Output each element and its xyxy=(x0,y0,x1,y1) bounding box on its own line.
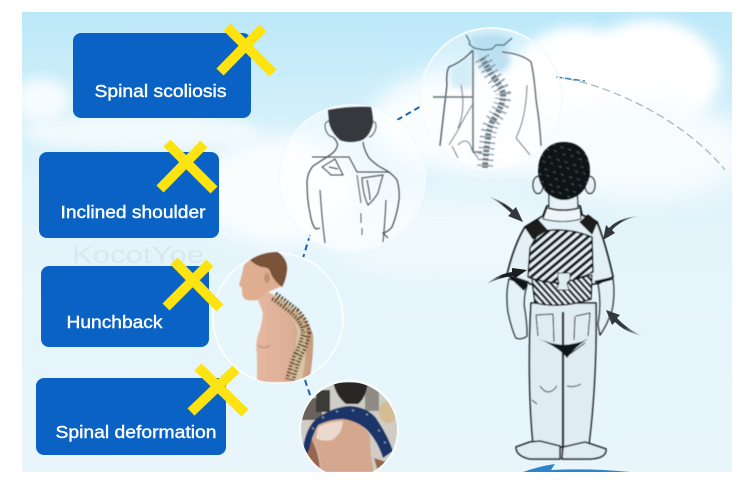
arrow: lower right pointing to hand xyxy=(606,310,643,336)
panel: hunchback label xyxy=(41,266,209,347)
panel: spinal scoliosis circle xyxy=(420,28,562,170)
vest lower xyxy=(532,275,592,305)
curly hair xyxy=(538,142,590,200)
body xyxy=(256,292,313,382)
panel: spinal deformation label xyxy=(36,378,226,455)
neck and collar xyxy=(549,190,578,210)
chest detail xyxy=(258,345,270,348)
icon: yellow cross on spinal deformation xyxy=(191,367,245,413)
blue shape at bottom edge xyxy=(523,464,630,472)
panel: inclined shoulder label xyxy=(39,152,219,238)
figure: boy wearing posture corrector xyxy=(507,142,614,459)
panel: spinal deformation label: Spinal deformation xyxy=(56,422,216,442)
panel: hunchback label: Hunchback xyxy=(66,312,163,332)
ears xyxy=(533,176,543,194)
arrow: mid left pointing to waist xyxy=(485,268,527,285)
panel: hunchback circle xyxy=(213,252,343,383)
shoulder straps xyxy=(525,215,597,239)
shirt xyxy=(507,206,613,284)
arrow: upper left pointing to shoulder xyxy=(488,196,523,222)
head xyxy=(239,260,284,300)
panel: spinal scoliosis label xyxy=(73,33,251,118)
shoes xyxy=(516,441,606,459)
dashed connector lines xyxy=(303,77,725,398)
panel: spinal scoliosis label: Spinal scoliosis xyxy=(94,81,227,101)
arrow: upper right pointing to shoulder xyxy=(603,216,640,240)
panel: inclined shoulder label: Inclined shoulder xyxy=(60,202,206,222)
watermark: KocotYoe xyxy=(72,242,204,269)
panel: inclined shoulder circle xyxy=(279,105,425,251)
panel: spinal deformation photo circle xyxy=(299,380,399,472)
vest buckle xyxy=(556,273,570,290)
icon: yellow cross on inclined shoulder xyxy=(160,143,214,190)
vest upper xyxy=(528,230,593,283)
trousers xyxy=(529,303,596,447)
icon: yellow cross on hunchback xyxy=(166,261,220,308)
icon: yellow cross on spinal scoliosis xyxy=(220,27,273,73)
arms xyxy=(507,279,614,339)
